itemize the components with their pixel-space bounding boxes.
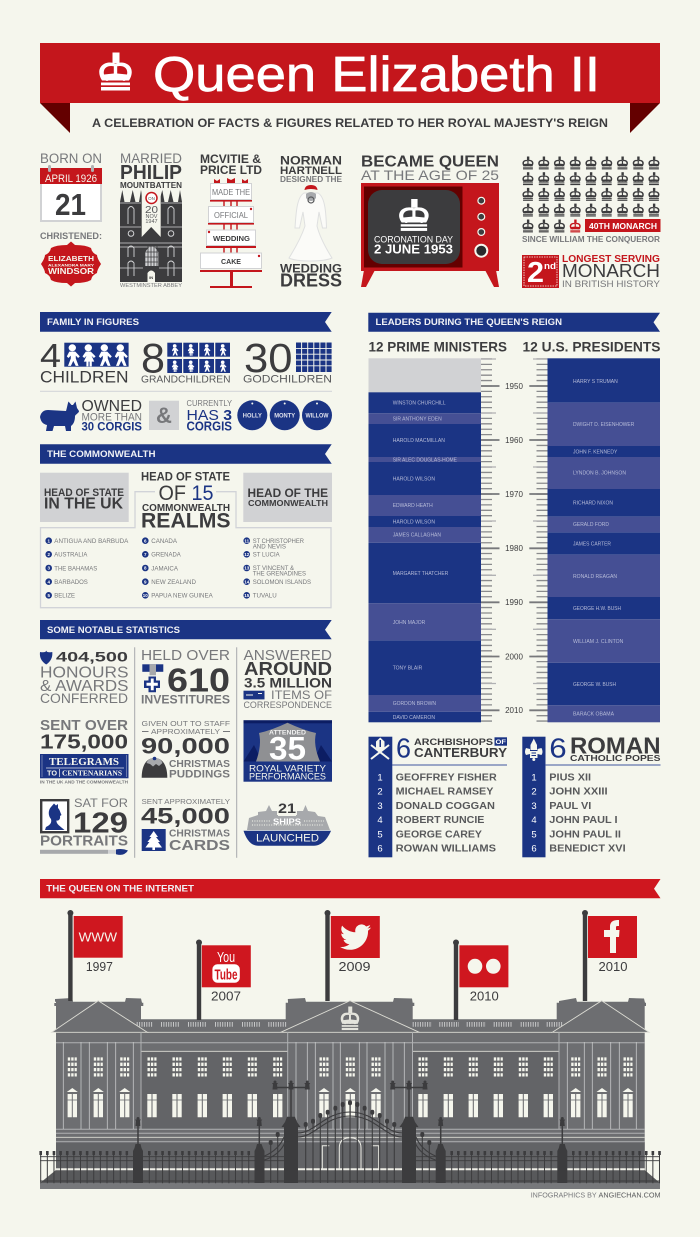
stat: telegrams: TO <box>47 768 57 777</box>
panel: archbishops of canterbury: 2 <box>377 787 383 798</box>
panel: married philip: WESTMINSTER ABBEY <box>120 283 182 289</box>
centre text: realms: HEAD OF STATE <box>141 471 230 483</box>
icon: dress <box>289 185 332 261</box>
grandchildren <box>141 335 230 385</box>
panel: archbishops of canterbury <box>368 733 507 857</box>
chart: presidents timeline: DWIGHT D. EISENHOWER <box>573 422 634 428</box>
stat: royal variety: ROYAL VARIETY <box>249 764 327 775</box>
title: Queen Elizabeth II <box>153 48 600 102</box>
flag: www 1997: WWW <box>79 930 118 945</box>
stat: correspondence: CORRESPONDENCE <box>244 700 332 710</box>
chart: presidents timeline: JOHN F. KENNEDY <box>573 450 618 456</box>
chart: prime ministers timeline: TONY BLAIR <box>393 666 422 672</box>
grandchildren: GRANDCHILDREN <box>141 373 230 385</box>
panel: archbishops of canterbury: 6 <box>377 843 383 854</box>
box: head of state in the uk: HEAD OF STATE <box>44 487 124 499</box>
chart: presidents timeline: GEORGE H.W. BUSH <box>573 606 621 612</box>
palace body <box>40 998 660 1189</box>
list of realms: NEW ZEALAND <box>151 579 196 586</box>
chart: presidents timeline: GEORGE W. BUSH <box>573 682 616 688</box>
chart: presidents timeline: HARRY S TRUMAN <box>573 379 618 385</box>
icon: facebook f <box>604 920 620 953</box>
stat: investitures: 610 <box>167 662 230 699</box>
icon: westminster abbey: NOV <box>146 214 158 220</box>
panel: roman catholic popes: 5 <box>531 829 537 840</box>
chart: year ruler: 1980 <box>505 544 523 553</box>
panel: wedding cake <box>200 154 262 288</box>
palace door <box>322 1138 379 1169</box>
chart: year ruler <box>481 358 548 722</box>
flag: flickr 2010: 2010 <box>470 989 499 1003</box>
icon: pediment crown <box>341 1006 359 1030</box>
godchildren: GODCHILDREN <box>243 373 332 385</box>
stat: puddings: CHRISTMAS <box>169 758 230 770</box>
icon: calendar <box>40 165 102 222</box>
list of realms: BELIZE <box>54 593 75 600</box>
stat: correspondence <box>244 647 332 710</box>
panel: roman catholic popes: PAUL VI <box>549 801 592 812</box>
illustration: buckingham palace <box>39 998 661 1189</box>
40th monarch label: 40TH MONARCH <box>589 222 657 231</box>
panel: roman catholic popes: 2 <box>531 787 537 798</box>
heading: leaders <box>368 313 660 332</box>
centre text: realms: REALMS <box>141 509 230 532</box>
stat: puddings: GIVEN OUT TO STAFF <box>142 719 230 728</box>
icon: westminster abbey: IN <box>149 275 153 280</box>
icon: westminster abbey: ON <box>148 196 155 201</box>
stat: investitures: INVESTITURES <box>141 694 230 706</box>
panel: wedding dress: HARTNELL <box>280 165 342 177</box>
subtitle: A CELEBRATION OF FACTS & FIGURES RELATED TO HER ROYAL MAJESTY'S REIGN <box>92 116 608 130</box>
box: head of the commonwealth <box>243 473 332 522</box>
stat: portraits <box>40 798 128 855</box>
children: CHILDREN <box>40 368 128 386</box>
main gate <box>264 1102 436 1183</box>
icon: tiered cake: OFFICIAL <box>214 211 249 220</box>
panel: wedding dress <box>280 154 343 290</box>
chart: prime ministers timeline: SIR ANTHONY EDEN <box>393 417 442 423</box>
list of realms: ST VINCENT & <box>253 565 295 572</box>
chart: year ruler: 1970 <box>505 490 523 499</box>
chart: presidents timeline: BARACK OBAMA <box>573 712 614 718</box>
panel: 40th monarch crowns <box>522 156 660 289</box>
panel: roman catholic popes: 6 <box>549 733 567 764</box>
godchildren <box>243 335 332 385</box>
stat: ships <box>244 800 331 846</box>
stat: telegrams: SENT OVER <box>40 718 129 734</box>
heading: the queen on the internet <box>40 879 660 898</box>
panel: wedding dress: WEDDING <box>280 264 342 276</box>
stat: ships: SHIPS <box>273 817 302 826</box>
heading: the commonwealth: THE COMMONWEALTH <box>47 449 156 460</box>
panel: 40th monarch crowns: IN BRITISH HISTORY <box>562 279 660 289</box>
panel: married philip <box>120 151 182 289</box>
list of realms: 1 <box>47 538 50 543</box>
stamp: 2nd: 2 <box>527 257 544 289</box>
balustrades <box>137 1022 563 1027</box>
stat: investitures <box>141 647 230 706</box>
chart: year ruler: 1990 <box>505 598 523 607</box>
railings <box>39 1153 661 1181</box>
chart: prime ministers timeline: HAROLD WILSON <box>393 477 435 483</box>
panel: wedding dress: DRESS <box>280 270 342 290</box>
panel: archbishops of canterbury: ROBERT RUNCIE <box>396 815 485 826</box>
panel: archbishops of canterbury: ROWAN WILLIAMS <box>396 843 496 854</box>
heading: some notable statistics <box>40 620 332 639</box>
panel: wedding dress: DESIGNED THE <box>280 175 343 184</box>
ampersand box: & <box>156 403 172 428</box>
heading: family in figures <box>40 312 332 332</box>
list of realms: SOLOMON ISLANDS <box>253 579 311 586</box>
stat: investitures: HELD OVER <box>141 647 230 664</box>
upper windows <box>68 1059 633 1075</box>
chart: prime ministers timeline: HAROLD WILSON <box>393 520 435 526</box>
panel: family figures: HAS 3 <box>186 407 232 424</box>
list of realms: THE BAHAMAS <box>54 565 97 572</box>
godchildren: 30 <box>244 335 292 381</box>
stat: royal variety: 35 <box>269 730 306 766</box>
heading: leaders: LEADERS DURING THE QUEEN'S REIGN <box>376 317 562 328</box>
heading: family in figures: FAMILY IN FIGURES <box>47 317 139 328</box>
flag: facebook 2010 <box>582 910 637 1001</box>
panel: became queen <box>361 154 499 287</box>
list of realms: BARBADOS <box>54 579 88 586</box>
panel: archbishops of canterbury: DONALD COGGAN <box>396 801 495 812</box>
list of realms: TUVALU <box>253 593 277 600</box>
panel: family figures <box>40 335 332 434</box>
stat: portraits: PORTRAITS <box>40 834 128 850</box>
corgi name tags: MONTY <box>274 414 295 420</box>
list of realms: 12 <box>244 552 250 557</box>
stat: puddings: PUDDINGS <box>169 768 230 780</box>
icon: name plaque: ALEXANDRA MARY <box>48 262 94 268</box>
icon: westminster abbey: 1947 <box>145 219 158 225</box>
stat: portraits: SAT FOR <box>74 798 128 810</box>
stat: portraits: 129 <box>73 807 128 839</box>
credit link: ANGIECHAN.COM <box>598 1190 660 1199</box>
icon: calendar: 21 <box>55 187 86 222</box>
icon: name plaque: WINDSOR <box>48 266 94 276</box>
list of realms: 2 <box>47 552 50 557</box>
heading: some notable statistics: SOME NOTABLE STATISTICS <box>47 625 180 636</box>
ampersand box <box>149 401 179 430</box>
chart: year ruler: 1950 <box>505 382 523 391</box>
flag: facebook 2010: 2010 <box>598 960 628 974</box>
list of realms: ST CHRISTOPHER <box>253 538 304 545</box>
panel: archbishops of canterbury: ARCHBISHOPS <box>414 737 493 748</box>
stat: telegrams: CENTENARIANS <box>62 768 122 777</box>
chart: prime ministers timeline: DAVID CAMERON <box>393 715 435 721</box>
list of realms: GRENADA <box>151 552 181 559</box>
panel: born on: CHRISTENED: <box>40 231 102 241</box>
gate pillars and lamps <box>133 1080 567 1183</box>
panel: archbishops of canterbury: 5 <box>377 829 383 840</box>
centre text: realms: COMMONWEALTH <box>142 503 230 514</box>
panel: wedding cake: PRICE LTD <box>200 165 262 177</box>
icon: tiered cake: WEDDING <box>213 234 250 243</box>
stat: royal variety: ATTENDED <box>269 730 307 736</box>
icon: mitre and crossed staffs <box>371 738 389 759</box>
panel: wedding dress: NORMAN <box>280 154 342 168</box>
stat: christmas cards: SENT APPROXIMATELY <box>142 797 230 806</box>
stat: christmas cards: CARDS <box>169 837 230 854</box>
crown grid <box>522 156 659 232</box>
panel: archbishops of canterbury: 1 <box>377 773 383 784</box>
panel: roman catholic popes: BENEDICT XVI <box>549 843 626 854</box>
flag: youtube 2007: Tube <box>214 966 238 984</box>
stat: christmas cards: CHRISTMAS <box>169 828 230 840</box>
stamp: 2nd: nd <box>544 261 556 271</box>
stat: royal variety: PERFORMANCES <box>249 772 326 782</box>
stat: correspondence: ANSWERED <box>244 647 332 664</box>
flag: twitter 2009 <box>324 910 380 1001</box>
panel: commonwealth <box>40 471 332 608</box>
list of realms: JAMAICA <box>151 565 179 572</box>
panel: married philip: MOUNTBATTEN <box>120 181 182 190</box>
flag: flickr 2010 <box>453 940 508 1020</box>
icon: crown <box>99 52 132 90</box>
corgi name tags: HOLLY <box>243 414 262 420</box>
box: head of the commonwealth: COMMONWEALTH <box>248 498 328 508</box>
chart: prime ministers timeline: MARGARET THATCHER <box>393 571 448 577</box>
chart: presidents timeline: LYNDON B. JOHNSON <box>573 471 626 477</box>
panel: archbishops of canterbury: 4 <box>377 815 383 826</box>
icon: calendar: APRIL 1926 <box>45 173 97 185</box>
list of realms: ST LUCIA <box>253 552 280 559</box>
icon: name plaque <box>41 242 101 286</box>
panel: born on: BORN ON <box>40 151 102 166</box>
panel: archbishops of canterbury: GEOFFREY FISHER <box>396 773 498 784</box>
list of realms: 11 <box>244 538 250 543</box>
string courses <box>56 1032 645 1169</box>
panel: family figures: MORE THAN <box>82 411 142 423</box>
stat: correspondence: AROUND <box>244 659 332 679</box>
list of realms: 4 <box>47 579 50 584</box>
chart: year ruler: 1960 <box>505 436 523 445</box>
panel: roman catholic popes: 3 <box>531 801 537 812</box>
panel: roman catholic popes: 1 <box>531 773 537 784</box>
chart: prime ministers timeline: JAMES CALLAGHAN <box>393 533 441 539</box>
list of realms: 8 <box>144 566 147 571</box>
corgi name tags: WILLOW <box>306 414 329 420</box>
panel: married philip: PHILIP <box>120 162 182 184</box>
stat: correspondence: ITEMS OF <box>271 688 332 702</box>
centre text: realms: OF 15 <box>158 482 214 505</box>
icon: television <box>361 183 499 287</box>
chart: prime ministers timeline <box>368 358 481 722</box>
title banner <box>40 43 660 133</box>
grandchildren: 8 <box>141 335 165 382</box>
stat: correspondence: 3.5 MILLION <box>244 675 332 690</box>
panel: archbishops of canterbury: 3 <box>377 801 383 812</box>
stat: christmas cards: 45,000 <box>141 803 230 828</box>
panel: archbishops of canterbury: 6 <box>396 733 411 764</box>
panel: statistics <box>40 647 332 858</box>
credit: INFOGRAPHICS BY <box>531 1190 597 1199</box>
pediments <box>52 1001 649 1032</box>
chart: year ruler: 2010 <box>505 706 523 715</box>
flag: youtube 2007 <box>196 940 251 1020</box>
panel: roman catholic popes: 4 <box>531 815 537 826</box>
list of realms: CANADA <box>151 538 178 545</box>
chart: prime ministers timeline: SIR ALEC DOUGLAS-HOME <box>393 458 457 464</box>
list of realms: THE GRENADINES <box>253 570 306 578</box>
icon: tiered cake: CAKE <box>221 257 241 266</box>
panel: roman catholic popes: JOHN PAUL I <box>549 815 618 826</box>
flag: www 1997 <box>67 910 123 1001</box>
stat: royal variety <box>244 720 332 782</box>
stat: telegrams: TELEGRAMS <box>49 757 119 768</box>
stat: puddings: APPROXIMATELY <box>151 727 220 736</box>
heading: the commonwealth <box>40 444 332 464</box>
heading: 12 presidents: 12 U.S. PRESIDENTS <box>522 339 660 355</box>
chart: presidents timeline: GERALD FORD <box>573 522 609 528</box>
panel: became queen: BECAME QUEEN <box>361 154 499 170</box>
panel: family figures: 30 CORGIS <box>82 420 142 434</box>
panel: roman catholic popes: CATHOLIC POPES <box>570 753 661 763</box>
stat: telegrams: IN THE UK AND THE COMMONWEALTH <box>40 780 128 784</box>
chart: prime ministers timeline: WINSTON CHURCHILL <box>393 401 446 407</box>
panel: roman catholic popes <box>522 732 661 857</box>
panel: became queen: AT THE AGE OF 25 <box>361 167 499 183</box>
chart: presidents timeline: RONALD REAGAN <box>573 574 617 580</box>
chart: presidents timeline: JAMES CARTER <box>573 541 611 547</box>
icon: westminster abbey <box>120 190 182 282</box>
panel: archbishops of canterbury: GEORGE CAREY <box>396 829 482 840</box>
icon: twitter bird <box>340 924 371 950</box>
panel: 40th monarch crowns: MONARCH <box>562 261 660 281</box>
list of realms: AND NEVIS <box>253 544 286 550</box>
flag: youtube 2007: 2007 <box>211 989 241 1003</box>
panel: roman catholic popes: JOHN XXIII <box>549 787 608 798</box>
list of realms: 3 <box>47 566 50 571</box>
stat: honours: & AWARDS <box>40 678 128 695</box>
stat: ships: LAUNCHED <box>256 833 319 845</box>
icon: papal crest <box>525 738 542 761</box>
icon: tiered cake <box>200 178 262 288</box>
panel: roman catholic popes: JOHN PAUL II <box>549 829 621 840</box>
list of realms: 5 <box>47 593 50 598</box>
panel: family figures: OWNED <box>82 398 142 415</box>
corgi name tags <box>237 400 332 430</box>
stat: puddings <box>141 719 230 780</box>
stat: honours: CONFERRED <box>40 691 128 706</box>
panel: 40th monarch crowns: SINCE WILLIAM THE CONQUEROR <box>522 235 660 244</box>
panel: 40th monarch crowns: LONGEST SERVING <box>562 253 660 265</box>
panel: family figures: CURRENTLY <box>186 398 232 408</box>
panel: born on <box>40 151 102 286</box>
chart: prime ministers timeline: JOHN MAJOR <box>393 620 425 626</box>
panel: married philip: MARRIED <box>120 151 182 166</box>
list of realms <box>45 537 311 600</box>
panel: wedding cake: MCVITIE & <box>200 154 261 166</box>
panel: roman catholic popes: 6 <box>531 843 537 854</box>
stat: honours <box>40 649 128 706</box>
list of realms: 9 <box>144 579 147 584</box>
icon: name plaque: ELIZABETH <box>48 254 94 263</box>
chart: presidents timeline: WILLIAM J. CLINTON <box>573 639 623 645</box>
stat: christmas cards <box>141 797 230 854</box>
chart: year ruler: 2000 <box>505 652 523 661</box>
flag: twitter 2009: 2009 <box>338 960 371 974</box>
stat: honours: HONOURS <box>40 664 128 681</box>
list of realms: ANTIGUA AND BARBUDA <box>54 538 129 545</box>
box: head of state in the uk <box>40 473 129 522</box>
stamp: 2nd <box>522 255 559 289</box>
chart: presidents timeline: RICHARD NIXON <box>573 501 613 507</box>
panel: roman catholic popes: PIUS XII <box>549 773 591 784</box>
stat: telegrams: 175,000 <box>40 731 128 753</box>
icon: television: CORONATION DAY <box>374 234 454 246</box>
icon: corgi <box>40 402 79 431</box>
lower windows <box>67 1088 634 1117</box>
chart: presidents timeline <box>548 358 660 722</box>
chart: prime ministers timeline: HAROLD MACMILLAN <box>393 438 445 444</box>
panel: roman catholic popes: ROMAN <box>570 732 660 758</box>
list of realms: 7 <box>144 552 147 557</box>
list of realms: 6 <box>144 538 147 543</box>
list of realms: 15 <box>244 593 250 598</box>
list of realms: 10 <box>143 593 148 598</box>
box: head of state in the uk: IN THE UK <box>44 496 124 512</box>
centre text: realms <box>141 471 230 532</box>
icon: television: 2 JUNE 1953 <box>374 242 453 256</box>
list of realms: 14 <box>244 579 250 584</box>
flag: www 1997: 1997 <box>86 960 113 974</box>
panel: archbishops of canterbury: OF <box>496 739 506 746</box>
stat: honours: 404,500 <box>56 649 128 665</box>
stat: puddings: 90,000 <box>141 733 230 758</box>
heading: 12 prime ministers: 12 PRIME MINISTERS <box>368 339 507 355</box>
list of realms: PAPUA NEW GUINEA <box>151 593 213 600</box>
children <box>40 337 129 386</box>
list of realms: 13 <box>244 566 250 571</box>
chart: prime ministers timeline: GORDON BROWN <box>393 701 436 707</box>
panel: archbishops of canterbury: CANTERBURY <box>414 745 507 760</box>
stat: telegrams <box>40 718 129 784</box>
panel: archbishops of canterbury: MICHAEL RAMSEY <box>396 787 494 798</box>
heading: the queen on the internet: THE QUEEN ON THE INTERNET <box>46 884 194 895</box>
icon: westminster abbey: 20 <box>145 205 159 216</box>
stat: ships: 21 <box>278 800 296 816</box>
chart: prime ministers timeline: EDWARD HEATH <box>393 503 433 509</box>
flag: youtube 2007: You <box>217 949 235 966</box>
panel: family figures: CORGIS <box>186 418 232 434</box>
children: 4 <box>40 337 61 374</box>
list of realms: AUSTRALIA <box>54 552 88 559</box>
box: head of the commonwealth: HEAD OF THE <box>248 488 328 500</box>
icon: tiered cake: MADE THE <box>212 188 250 197</box>
